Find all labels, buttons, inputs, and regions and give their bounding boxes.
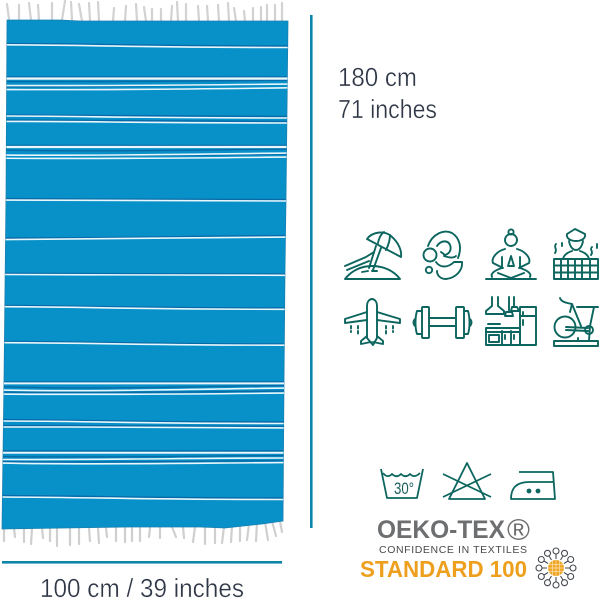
icon: dumbbell <box>414 307 472 338</box>
usage icons <box>345 229 598 346</box>
certification logo: OEKO-TEX Standard 100 <box>360 514 576 588</box>
icon: low heat iron <box>511 472 555 499</box>
OEKO-TEX wordmark: OEKO-TEX <box>377 516 505 544</box>
bottom fringe <box>4 521 282 546</box>
towel body <box>2 20 288 529</box>
icon: kitchen <box>486 297 536 345</box>
height label <box>338 62 437 124</box>
standard 100: STANDARD 100 <box>360 556 527 582</box>
icon: airplane <box>345 299 400 345</box>
towel stripes <box>0 44 290 499</box>
care symbols <box>381 463 555 499</box>
icon: mother and baby <box>424 232 462 279</box>
registered mark: ® <box>507 514 530 547</box>
icon: beach umbrella and lounger <box>345 232 401 279</box>
icon: certification flower <box>536 548 576 588</box>
height dimension line <box>310 15 313 528</box>
tagline: CONFIDENCE IN TEXTILES <box>379 544 527 556</box>
icon: do not bleach <box>443 463 491 499</box>
icon: wash at 30 degrees <box>381 469 423 498</box>
height label: 180 cm <box>338 62 417 92</box>
icon: sauna with towel turban <box>554 229 598 279</box>
height label: 71 inches <box>338 94 437 124</box>
width dimension line <box>2 561 282 564</box>
icon: yoga pose <box>486 229 536 279</box>
icon: wash at 30 degrees: 30° <box>394 479 414 498</box>
towel illustration <box>0 1 290 546</box>
icon: exercise bike <box>554 298 598 346</box>
top fringe <box>7 1 282 21</box>
